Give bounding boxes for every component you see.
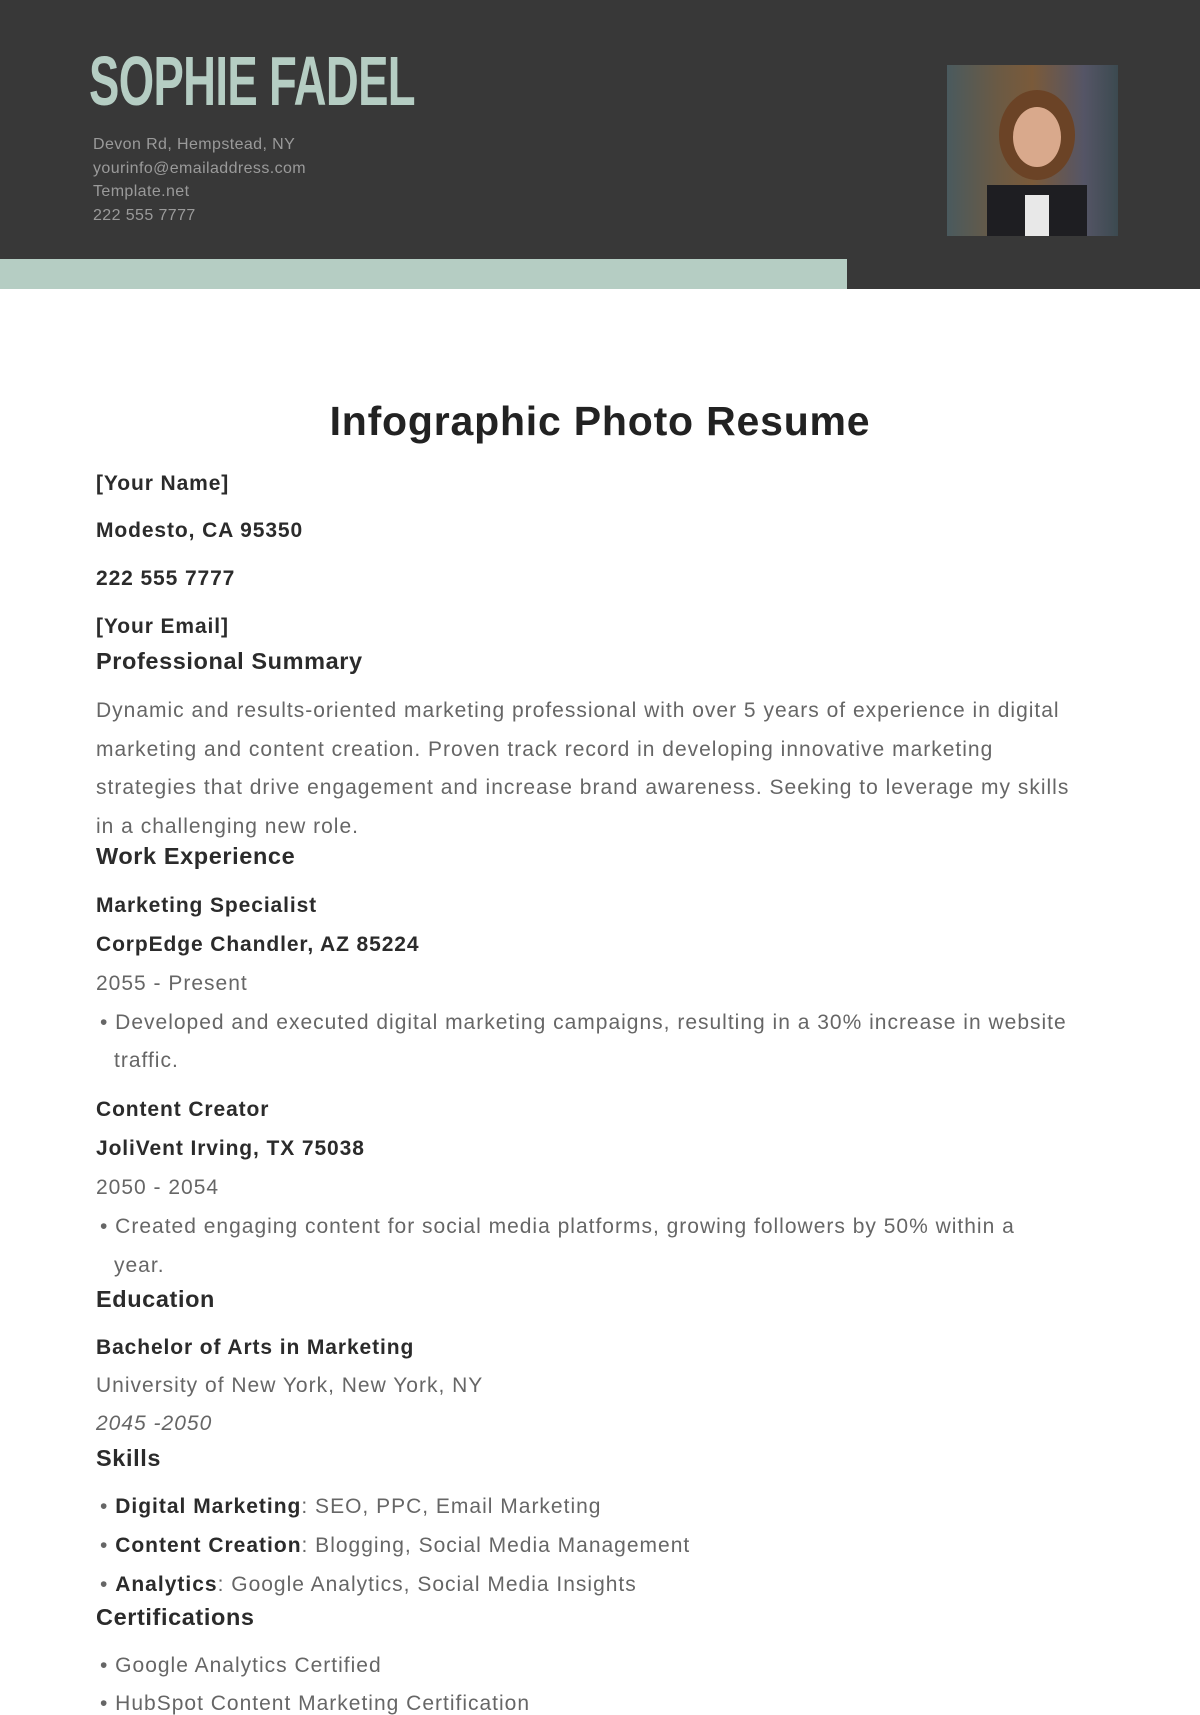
summary text [96, 699, 1069, 838]
heading: education: Education [96, 1286, 215, 1312]
job 1: CorpEdge Chandler, AZ 85224 [96, 933, 419, 956]
job 1 [96, 894, 1067, 1072]
accent bar [0, 259, 847, 289]
heading: skills: Skills [96, 1445, 161, 1471]
education entry: 2045 -2050 [96, 1412, 212, 1435]
job 2: year. [114, 1254, 165, 1277]
heading: certifications: Certifications [96, 1604, 255, 1630]
summary text: Dynamic and results-oriented marketing professional with over 5 years of experience in digital [96, 699, 1060, 722]
job 2: • Created engaging content for social media platforms, growing followers by 50% within a [100, 1215, 1015, 1238]
contact info [93, 136, 306, 224]
job 2: Content Creator [96, 1098, 269, 1121]
job 1: 2055 - Present [96, 972, 248, 995]
text: • HubSpot Content Marketing Certification [100, 1692, 530, 1715]
contact info: yourinfo@emailaddress.com [93, 160, 306, 176]
heading: professional summary: Professional Summary [96, 648, 363, 674]
skills list: • Content Creation: Blogging, Social Media Management [100, 1534, 690, 1557]
education entry [96, 1336, 483, 1435]
summary text: in a challenging new role. [96, 815, 359, 838]
text: [Your Email] [96, 615, 229, 638]
skills list: • Analytics: Google Analytics, Social Media Insights [100, 1573, 637, 1596]
education entry: University of New York, New York, NY [96, 1374, 483, 1397]
header [0, 0, 1200, 289]
title: Infographic Photo Resume [330, 398, 870, 444]
job 2 [96, 1098, 1015, 1277]
job 2: 2050 - 2054 [96, 1176, 219, 1199]
text: 222 555 7777 [96, 567, 235, 590]
job 2: JoliVent Irving, TX 75038 [96, 1137, 365, 1160]
heading: work experience: Work Experience [96, 843, 295, 869]
personal info: [Your Name] [96, 472, 229, 495]
name: SOPHIE FADEL [89, 42, 415, 120]
summary text: strategies that drive engagement and increase brand awareness. Seeking to leverage my skills [96, 776, 1069, 799]
skills list [100, 1495, 690, 1596]
job 1: traffic. [114, 1049, 179, 1072]
education entry: Bachelor of Arts in Marketing [96, 1336, 414, 1359]
certifications list [100, 1654, 530, 1715]
contact info: Devon Rd, Hempstead, NY [93, 136, 295, 153]
contact info: Template.net [93, 183, 189, 200]
contact info: 222 555 7777 [93, 206, 196, 224]
certifications list: • Google Analytics Certified [100, 1654, 382, 1677]
text: Modesto, CA 95350 [96, 519, 303, 542]
summary text: marketing and content creation. Proven track record in developing innovative marketing [96, 738, 993, 761]
job 1: • Developed and executed digital marketing campaigns, resulting in a 30% increase in website [100, 1011, 1067, 1034]
job 1: Marketing Specialist [96, 894, 317, 917]
photo [947, 65, 1118, 236]
skills list: • Digital Marketing: SEO, PPC, Email Marketing [100, 1495, 601, 1518]
